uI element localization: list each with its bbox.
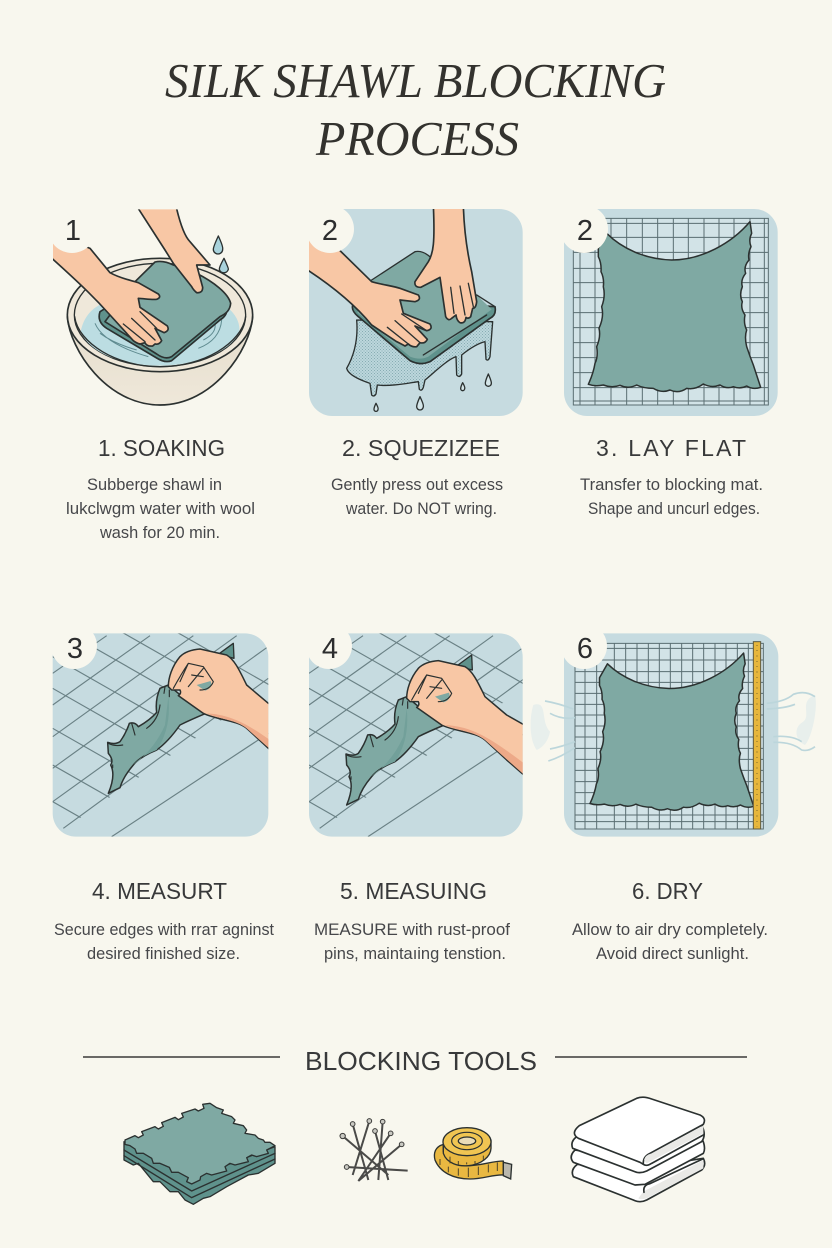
number badge: 1 <box>65 215 81 247</box>
number badge <box>306 205 354 253</box>
description: Shape and uncurl edges. <box>588 500 760 518</box>
number badge: 4 <box>322 633 338 665</box>
panel: step 3 lay flat <box>560 205 778 518</box>
blocking grid <box>575 643 763 829</box>
description: lukclwgm water with wool <box>66 500 255 518</box>
number badge <box>561 623 607 669</box>
panel background <box>309 633 523 837</box>
description: water. Do NOT wring. <box>345 500 497 518</box>
panel: step 5 measuring <box>309 633 523 962</box>
description: Allow to air dry completely. <box>572 921 768 939</box>
number badge: 2 <box>322 215 338 247</box>
description: Gently press out excess <box>331 476 503 494</box>
illustration: shawl on grid mat <box>564 209 778 416</box>
number badge: 6 <box>577 633 593 665</box>
description: pins, maintaıing tenstion. <box>324 945 506 963</box>
hand and fabric <box>106 642 268 794</box>
hand and fabric <box>346 655 545 805</box>
icon: water drops <box>213 236 228 273</box>
panel: step 1 soaking <box>48 205 255 542</box>
illustration: pinning the edge <box>52 633 268 837</box>
panel background <box>53 633 268 837</box>
title <box>165 53 666 166</box>
description <box>54 921 274 963</box>
mat grid <box>52 633 268 837</box>
illustration: pressing water out <box>305 205 523 416</box>
description <box>314 921 510 963</box>
heading: 5. MEASUING <box>340 878 487 904</box>
panel background <box>309 209 523 416</box>
description <box>66 476 255 542</box>
panel: step 2 squeeze <box>305 205 523 518</box>
title: PROCESS <box>315 111 519 166</box>
dripping water <box>347 320 493 411</box>
heading: 4. MEASURT <box>92 878 227 904</box>
mat grid <box>309 633 523 837</box>
section heading: blocking tools: BLOCKING TOOLS <box>305 1046 537 1076</box>
description: Secure edges with rrат agninst <box>54 921 274 939</box>
number badge <box>48 205 96 253</box>
description: Transfer to blocking mat. <box>580 476 763 494</box>
panel background <box>564 209 778 416</box>
description: Avoid direct sunlight. <box>596 945 749 963</box>
steam left <box>531 701 575 761</box>
illustration: drying shawl <box>531 633 816 837</box>
heading: 3. LAY FLAT <box>596 435 746 461</box>
description: MEASURE with rust-proof <box>314 921 510 939</box>
illustration: pinning the edge <box>309 633 523 837</box>
description <box>572 921 768 963</box>
icon: right hand <box>137 206 210 293</box>
panel background <box>564 633 778 837</box>
number badge <box>560 205 608 253</box>
icon: foam mat stack <box>124 1103 275 1204</box>
shawl <box>99 261 231 362</box>
icon: tape measure <box>434 1128 512 1179</box>
title: SILK SHAWL BLOCKING <box>165 53 666 108</box>
description: Subberge shawl in <box>87 476 222 494</box>
shawl <box>352 251 495 364</box>
panel: step 6 dry <box>531 623 816 963</box>
number badge <box>306 623 352 669</box>
number badge: 3 <box>67 633 83 665</box>
description: desired finished size. <box>87 945 240 963</box>
icon: pins <box>340 1119 408 1181</box>
heading: 2. SQUEZIZEE <box>342 435 500 461</box>
icon: folded towels <box>571 1097 705 1202</box>
icon: right hand <box>415 205 477 323</box>
description <box>580 476 763 518</box>
icon: left hand <box>309 240 432 348</box>
number badge <box>51 623 97 669</box>
panel: step 4 measure <box>52 633 274 959</box>
ruler <box>753 642 761 829</box>
description: wash for 20 min. <box>99 524 220 542</box>
shawl <box>588 222 761 392</box>
blocking grid <box>573 218 768 405</box>
shawl <box>590 653 754 810</box>
illustration: bowl and hands <box>50 206 253 405</box>
heading: 1. SOAKING <box>98 435 225 461</box>
heading: 6. DRY <box>632 878 703 904</box>
icon: bowl <box>67 258 253 405</box>
icon: left hand <box>53 244 169 347</box>
number badge: 2 <box>577 215 593 247</box>
steam right <box>767 693 816 750</box>
description <box>331 476 503 518</box>
